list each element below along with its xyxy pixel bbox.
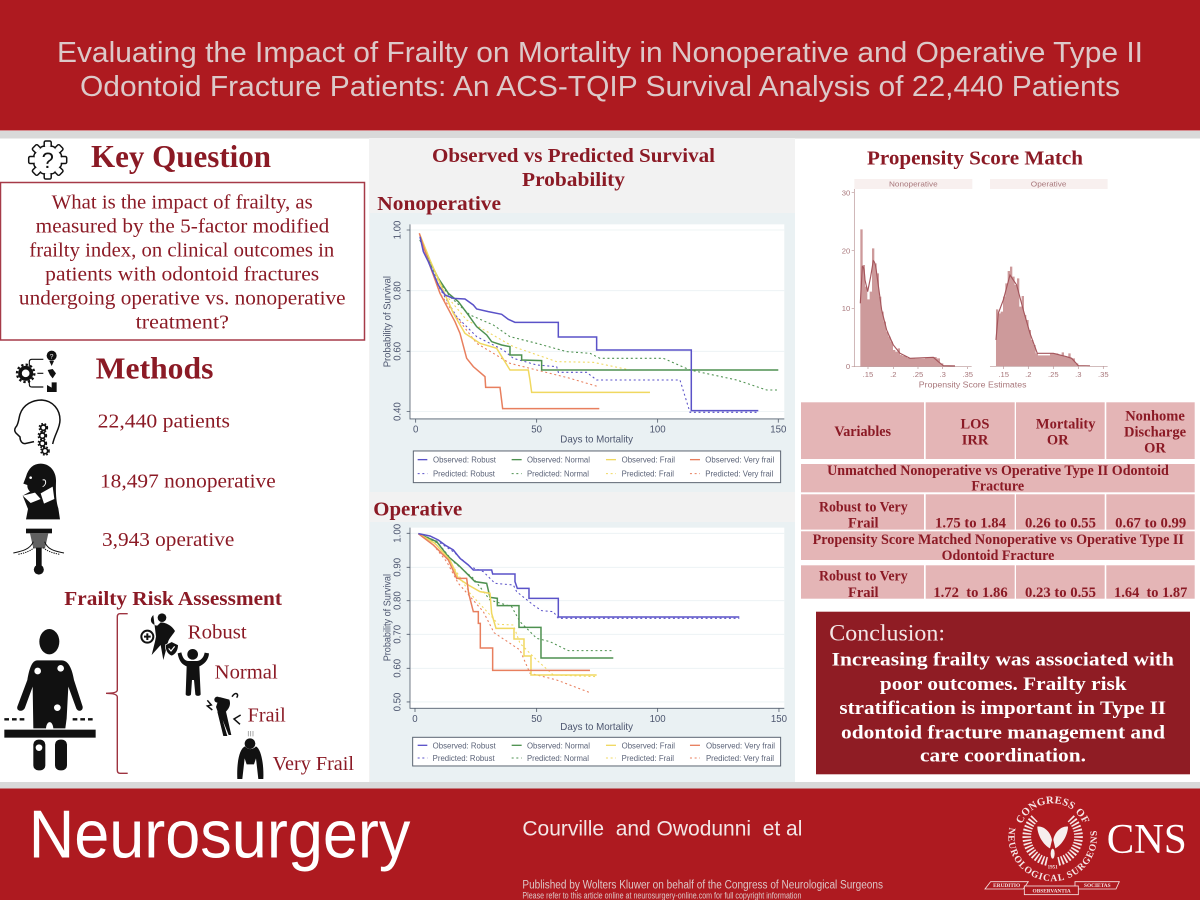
legend: Observed: Normal: [527, 741, 590, 750]
icon: normal: [178, 649, 209, 696]
conclusion text: [832, 650, 1174, 767]
chart: operative survival: 1.00: [393, 524, 404, 543]
chart: nonoperative survival: 0: [413, 425, 418, 436]
legend: Observed: Normal: [527, 456, 590, 465]
chart: propensity histograms: Nonoperative: [889, 180, 938, 189]
line: observed very frail: [418, 534, 590, 670]
icon: robust: [141, 613, 178, 660]
line: predicted frail: [418, 534, 597, 677]
bars: nonoperative: [860, 229, 955, 366]
table section: propensity matched: Propensity Score Matched Nonoperative vs Operative Type II: [813, 532, 1184, 548]
text: operative patients: 3,943 operative: [102, 530, 234, 551]
table section: unmatched: Fracture: [971, 479, 1025, 495]
chart: operative survival: 0.70: [393, 625, 404, 644]
line: observed frail: [420, 235, 650, 392]
legend: Predicted: Frail: [622, 469, 674, 478]
line: predicted robust: [418, 534, 739, 618]
line: predicted very frail: [419, 233, 598, 387]
line: predicted normal: [420, 240, 778, 390]
line: predicted robust: [420, 240, 758, 412]
legend: Predicted: Robust: [433, 754, 495, 763]
question box: treatment?: [136, 312, 229, 333]
chart: operative survival: 0: [412, 714, 418, 725]
chart: propensity histograms: .35: [962, 370, 973, 379]
line: predicted frail: [420, 235, 690, 370]
line: observed normal: [418, 534, 613, 658]
table section: propensity matched: 1.64 to 1.87: [1114, 585, 1187, 601]
footer banner: [0, 782, 1200, 900]
chart: nonoperative survival: 150: [770, 425, 786, 436]
chart: nonoperative survival: 0.40: [393, 402, 404, 421]
table header row: LOS: [960, 416, 990, 432]
heading: methods: Methods: [96, 350, 213, 386]
chart: nonoperative survival: Days to Mortality: [560, 434, 633, 445]
legend: Predicted: Normal: [527, 754, 589, 763]
chart: nonoperative survival: 0.80: [393, 281, 404, 300]
legend: Observed: Robust: [433, 741, 496, 750]
table section: unmatched: [819, 463, 1186, 532]
legend: Observed: Very frail: [705, 456, 775, 465]
icon: frail: [207, 694, 241, 736]
table section: unmatched: Unmatched Nonoperative vs Operative Type II Odontoid: [827, 463, 1169, 479]
legend: [413, 451, 781, 483]
table section: unmatched: Robust to Very: [819, 500, 908, 516]
chart: propensity histograms: Propensity Score Estimates: [919, 379, 1026, 389]
table section: propensity matched: 1.72 to 1.86: [933, 585, 1008, 601]
conclusion label: Conclusion:: [829, 621, 945, 646]
title: [57, 37, 1143, 103]
logo: congress of neurological surgeons seal: CONGRESS OF: [1016, 796, 1090, 822]
logo: congress of neurological surgeons seal: [984, 796, 1120, 896]
chart: nonoperative survival: 100: [650, 425, 666, 436]
legend: Predicted: Frail: [622, 754, 674, 763]
legend: Predicted: Robust: [433, 469, 496, 478]
legend: Observed: Frail: [622, 456, 675, 465]
table header row: Variables: [834, 424, 891, 440]
table header row: IRR: [962, 432, 989, 448]
table header row: [834, 408, 1187, 457]
density curves: [860, 261, 1090, 366]
question box: What is the impact of frailty, as: [52, 192, 313, 213]
question box: patients with odontoid fractures: [45, 264, 319, 286]
line: predicted normal: [418, 534, 613, 651]
chart: operative survival: 0.60: [393, 659, 404, 678]
chart: propensity histograms: .3: [1075, 370, 1082, 379]
line: observed normal: [420, 240, 778, 370]
header banner: [0, 0, 1200, 138]
legend: Predicted: Very frail: [705, 469, 774, 478]
logo: congress of neurological surgeons seal: 1951: [1048, 866, 1058, 871]
question box: frailty index, on clinical outcomes in: [29, 240, 335, 261]
panel: conclusion: [816, 612, 1190, 774]
panel: key question: [0, 138, 364, 340]
table section: unmatched: 0.26 to 0.55: [1025, 516, 1096, 532]
icon: very frail: [237, 731, 263, 779]
chart: propensity histograms: 30: [842, 188, 850, 197]
table header row: Nonhome: [1125, 408, 1185, 424]
logo: congress of neurological surgeons seal: NEUROLOGICAL SURGEONS: [1008, 828, 1098, 882]
chart: nonoperative survival: [370, 193, 795, 492]
publisher note: Published by Wolters Kluwer on behalf of the Congress of Neurological Surgeons: [522, 879, 883, 891]
title: Odontoid Fracture Patients: An ACS-TQIP Survival Analysis of 22,440 Patients: [80, 71, 1120, 103]
icon: gear with question mark: [29, 141, 67, 179]
question box: [0, 182, 364, 340]
legend: Predicted: Normal: [527, 469, 589, 478]
chart: propensity histograms: [842, 179, 1109, 389]
table: odds ratios: [801, 402, 1195, 601]
icon: head with cervical spine: [15, 400, 60, 455]
logo: congress of neurological surgeons seal: SOCIETAS: [1084, 883, 1111, 889]
table header row: OR: [1144, 441, 1166, 457]
chart: operative survival: 50: [531, 714, 542, 725]
journal name: Neurosurgery: [29, 797, 410, 873]
chart: propensity histograms: 20: [842, 246, 850, 255]
table header row: Discharge: [1124, 424, 1187, 440]
chart: propensity histograms: .2: [890, 370, 897, 379]
icon: head with cervical collar: [23, 464, 60, 519]
heading: key question: Key Question: [91, 138, 271, 174]
table section: propensity matched: Odontoid Fracture: [942, 548, 1055, 564]
heading: nonoperative: Nonoperative: [377, 193, 501, 215]
panel: frailty risk assessment: [4, 588, 354, 779]
chart: propensity histograms: .15: [863, 370, 873, 379]
icon: methods process: ?: [50, 353, 54, 360]
bars: operative: [996, 267, 1090, 366]
table header row: OR: [1047, 432, 1069, 448]
line: predicted very frail: [418, 534, 590, 693]
line: observed frail: [418, 534, 597, 675]
title: Evaluating the Impact of Frailty on Mortality in Nonoperative and Operative Type II: [57, 37, 1143, 69]
authors: Courville and Owodunni et al: [522, 818, 802, 841]
conclusion text: poor outcomes. Frailty risk: [880, 674, 1127, 695]
chart: operative survival: 0.80: [393, 591, 404, 610]
line: observed robust: [420, 237, 758, 411]
chart: propensity histograms: .3: [939, 370, 946, 379]
table section: propensity matched: [813, 532, 1187, 601]
chart: operative survival: 0.50: [393, 693, 404, 711]
conclusion text: Increasing frailty was associated with: [832, 650, 1174, 671]
heading: observed vs predicted survival: [432, 145, 715, 191]
chart: propensity histograms: 10: [842, 304, 850, 313]
chart: operative survival: 100: [650, 714, 666, 725]
logo: CNS letters: CNS: [1107, 817, 1187, 863]
chart: propensity histograms: .25: [913, 370, 923, 379]
chart: nonoperative survival: 1.00: [393, 221, 404, 239]
label: robust: Robust: [188, 621, 247, 643]
chart: operative survival: [370, 499, 795, 782]
icon: human body with risk points: [4, 629, 96, 770]
label: very frail: Very Frail: [273, 753, 354, 775]
table section: propensity matched: Frail: [848, 585, 879, 601]
chart: propensity histograms: Operative: [1031, 180, 1066, 189]
legend: Observed: Very frail: [706, 741, 775, 750]
icon: gear with question mark: ?: [42, 148, 54, 173]
question box: measured by the 5-factor modified: [36, 216, 330, 238]
chart: propensity histograms: .15: [998, 370, 1009, 379]
chart: nonoperative survival: 0.60: [393, 342, 404, 361]
table section: unmatched: 0.67 to 0.99: [1115, 516, 1186, 532]
chart: operative survival: 150: [771, 714, 787, 725]
line: observed very frail: [419, 233, 599, 409]
table header row: Mortality: [1036, 416, 1096, 432]
text: nonoperative patients: 18,497 nonoperative: [100, 472, 276, 493]
chart: propensity histograms: .2: [1025, 370, 1032, 379]
heading: frailty risk assessment: Frailty Risk Assessment: [64, 588, 282, 610]
conclusion text: stratification is important in Type II: [839, 698, 1166, 719]
conclusion text: odontoid fracture management and: [841, 722, 1165, 743]
panel: propensity score match: [801, 148, 1195, 774]
heading: observed vs predicted survival: Probability: [522, 169, 625, 191]
conclusion text: care coordination.: [920, 746, 1086, 767]
panel: methods: [13, 350, 276, 575]
table section: unmatched: Frail: [848, 516, 879, 532]
label: frail: Frail: [248, 705, 286, 727]
text: total patients: 22,440 patients: [98, 411, 230, 432]
chart: nonoperative survival: 50: [531, 425, 542, 436]
chart: propensity histograms: .35: [1098, 370, 1109, 379]
heading: operative: Operative: [373, 499, 462, 521]
chart: propensity histograms: .25: [1048, 370, 1059, 379]
legend: Observed: Frail: [622, 741, 675, 750]
label: normal: Normal: [215, 661, 278, 683]
question box: undergoing operative vs. nonoperative: [19, 288, 346, 309]
chart: operative survival: 0.90: [393, 558, 404, 577]
heading: propensity score match: Propensity Score Match: [867, 148, 1083, 170]
table section: propensity matched: Robust to Very: [819, 569, 908, 585]
icon: cervical fixation: [13, 529, 64, 575]
table section: propensity matched: 0.23 to 0.55: [1025, 585, 1096, 601]
legend: Observed: Robust: [433, 456, 497, 465]
chart: propensity histograms: 0: [846, 362, 850, 371]
icon: methods process: [17, 351, 57, 392]
chart: operative survival: Probability of Survival: [382, 574, 393, 661]
publisher note: [522, 879, 883, 900]
chart: nonoperative survival: Probability of Survival: [382, 276, 393, 367]
panel: survival charts: [370, 145, 795, 782]
chart: operative survival: Days to Mortality: [560, 722, 633, 733]
legend: Predicted: Very frail: [706, 754, 774, 763]
line: observed robust: [418, 534, 739, 617]
logo: congress of neurological surgeons seal: OBSERVANTIA: [1033, 888, 1071, 894]
legend: [413, 737, 781, 766]
brace: [106, 614, 128, 773]
center column background: [369, 138, 795, 782]
table section: unmatched: 1.75 to 1.84: [935, 516, 1006, 532]
logo: congress of neurological surgeons seal: ERUDITIO: [993, 883, 1020, 889]
heading: observed vs predicted survival: Observed vs Predicted Survival: [432, 145, 715, 167]
